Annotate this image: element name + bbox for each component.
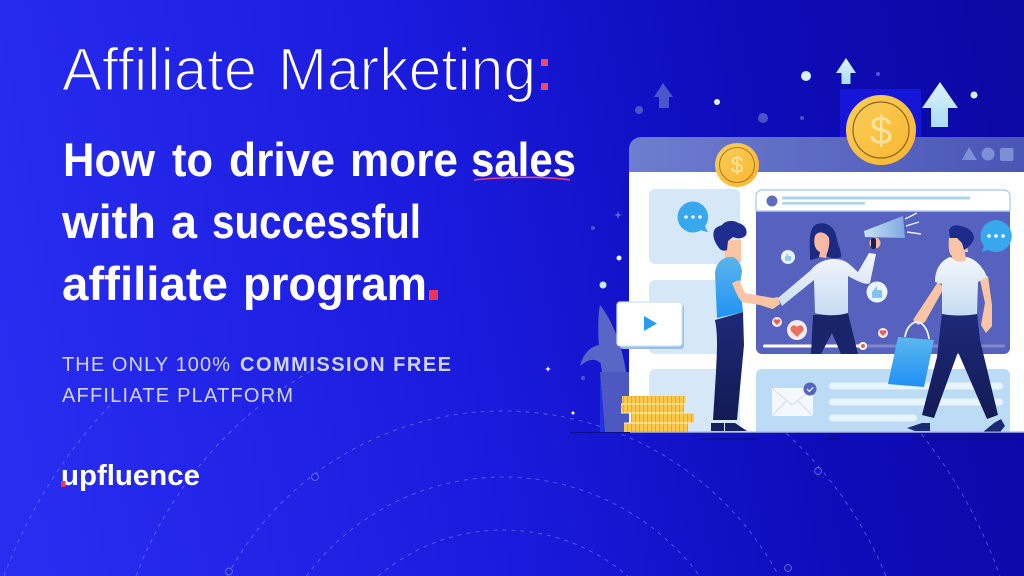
torso and arms bbox=[778, 253, 876, 315]
pants bbox=[922, 313, 998, 419]
arm bbox=[732, 280, 778, 309]
browser window bbox=[629, 137, 1024, 432]
headline: How bbox=[63, 133, 155, 186]
right arm bbox=[980, 276, 992, 333]
plant pot bbox=[600, 372, 629, 432]
browser body bbox=[629, 160, 1024, 432]
email card bbox=[756, 369, 1010, 432]
speech bubble right bbox=[980, 220, 1012, 252]
progress bar bbox=[763, 344, 1005, 348]
headline: more bbox=[350, 133, 458, 186]
arrow: large up arrow bbox=[922, 82, 958, 127]
person: woman with megaphone bbox=[778, 223, 880, 354]
headline: program bbox=[243, 257, 427, 310]
headline bbox=[61, 133, 576, 310]
head bbox=[949, 236, 968, 262]
subtitle bbox=[62, 354, 451, 407]
person: right man bbox=[907, 225, 1005, 432]
left arm bbox=[913, 282, 944, 325]
left sidebar cards bbox=[649, 189, 740, 432]
subtitle: THE ONLY 100% bbox=[62, 354, 230, 376]
coin stack bbox=[621, 396, 694, 432]
arrow: small up arrow bbox=[836, 58, 856, 84]
upfluence logo: upfluence bbox=[61, 460, 200, 492]
headline: to bbox=[172, 133, 213, 186]
video panel header bbox=[756, 190, 1010, 211]
small coin bbox=[715, 143, 759, 187]
large coin: $ bbox=[870, 109, 892, 153]
title: Affiliate bbox=[62, 36, 257, 103]
ground line bbox=[570, 432, 1024, 440]
headline: affiliate bbox=[62, 257, 228, 310]
arrow: dim up arrow bbox=[654, 83, 673, 108]
shirt bbox=[935, 257, 987, 316]
title: Marketing bbox=[278, 36, 536, 103]
red underline under sales bbox=[474, 177, 570, 180]
shirt bbox=[715, 257, 743, 318]
pants bbox=[713, 312, 744, 420]
icon: play bbox=[644, 316, 657, 331]
hair bbox=[949, 225, 974, 250]
header shapes bbox=[962, 147, 1014, 161]
handshake bbox=[766, 297, 780, 309]
dashed orbit arcs bbox=[4, 368, 1000, 576]
shoes bbox=[907, 419, 1005, 432]
headline: a bbox=[171, 195, 198, 248]
speech bubble left bbox=[678, 202, 708, 232]
hair bbox=[713, 221, 747, 251]
hand bbox=[870, 238, 880, 248]
shopping bag bbox=[888, 322, 934, 387]
reaction icons bbox=[772, 250, 888, 340]
hair bbox=[810, 223, 841, 260]
title bbox=[62, 36, 548, 103]
megaphone bbox=[864, 213, 921, 238]
title red colon bbox=[541, 59, 548, 90]
square behind coin bbox=[840, 89, 921, 139]
decorative dots and sparkles bbox=[545, 71, 978, 414]
pants bbox=[811, 313, 858, 354]
headline: with bbox=[61, 195, 156, 248]
face bbox=[814, 232, 829, 258]
icon: plant bbox=[580, 305, 629, 432]
video panel bbox=[756, 190, 1010, 354]
headline: successful bbox=[212, 195, 421, 248]
head bbox=[722, 240, 741, 270]
large coin bbox=[846, 95, 916, 165]
icon: check badge bbox=[804, 382, 816, 396]
subtitle: AFFILIATE PLATFORM bbox=[62, 385, 293, 407]
icon: envelope bbox=[772, 388, 813, 416]
headline: drive bbox=[229, 133, 335, 186]
video play card bbox=[617, 302, 684, 349]
subtitle: COMMISSION FREE bbox=[240, 354, 451, 376]
headline: sales bbox=[471, 133, 576, 186]
person: left man bbox=[711, 221, 778, 431]
small coin: $ bbox=[731, 152, 744, 178]
headline red full stop bbox=[429, 290, 438, 300]
browser header bbox=[629, 137, 1024, 172]
shoes bbox=[711, 423, 747, 431]
